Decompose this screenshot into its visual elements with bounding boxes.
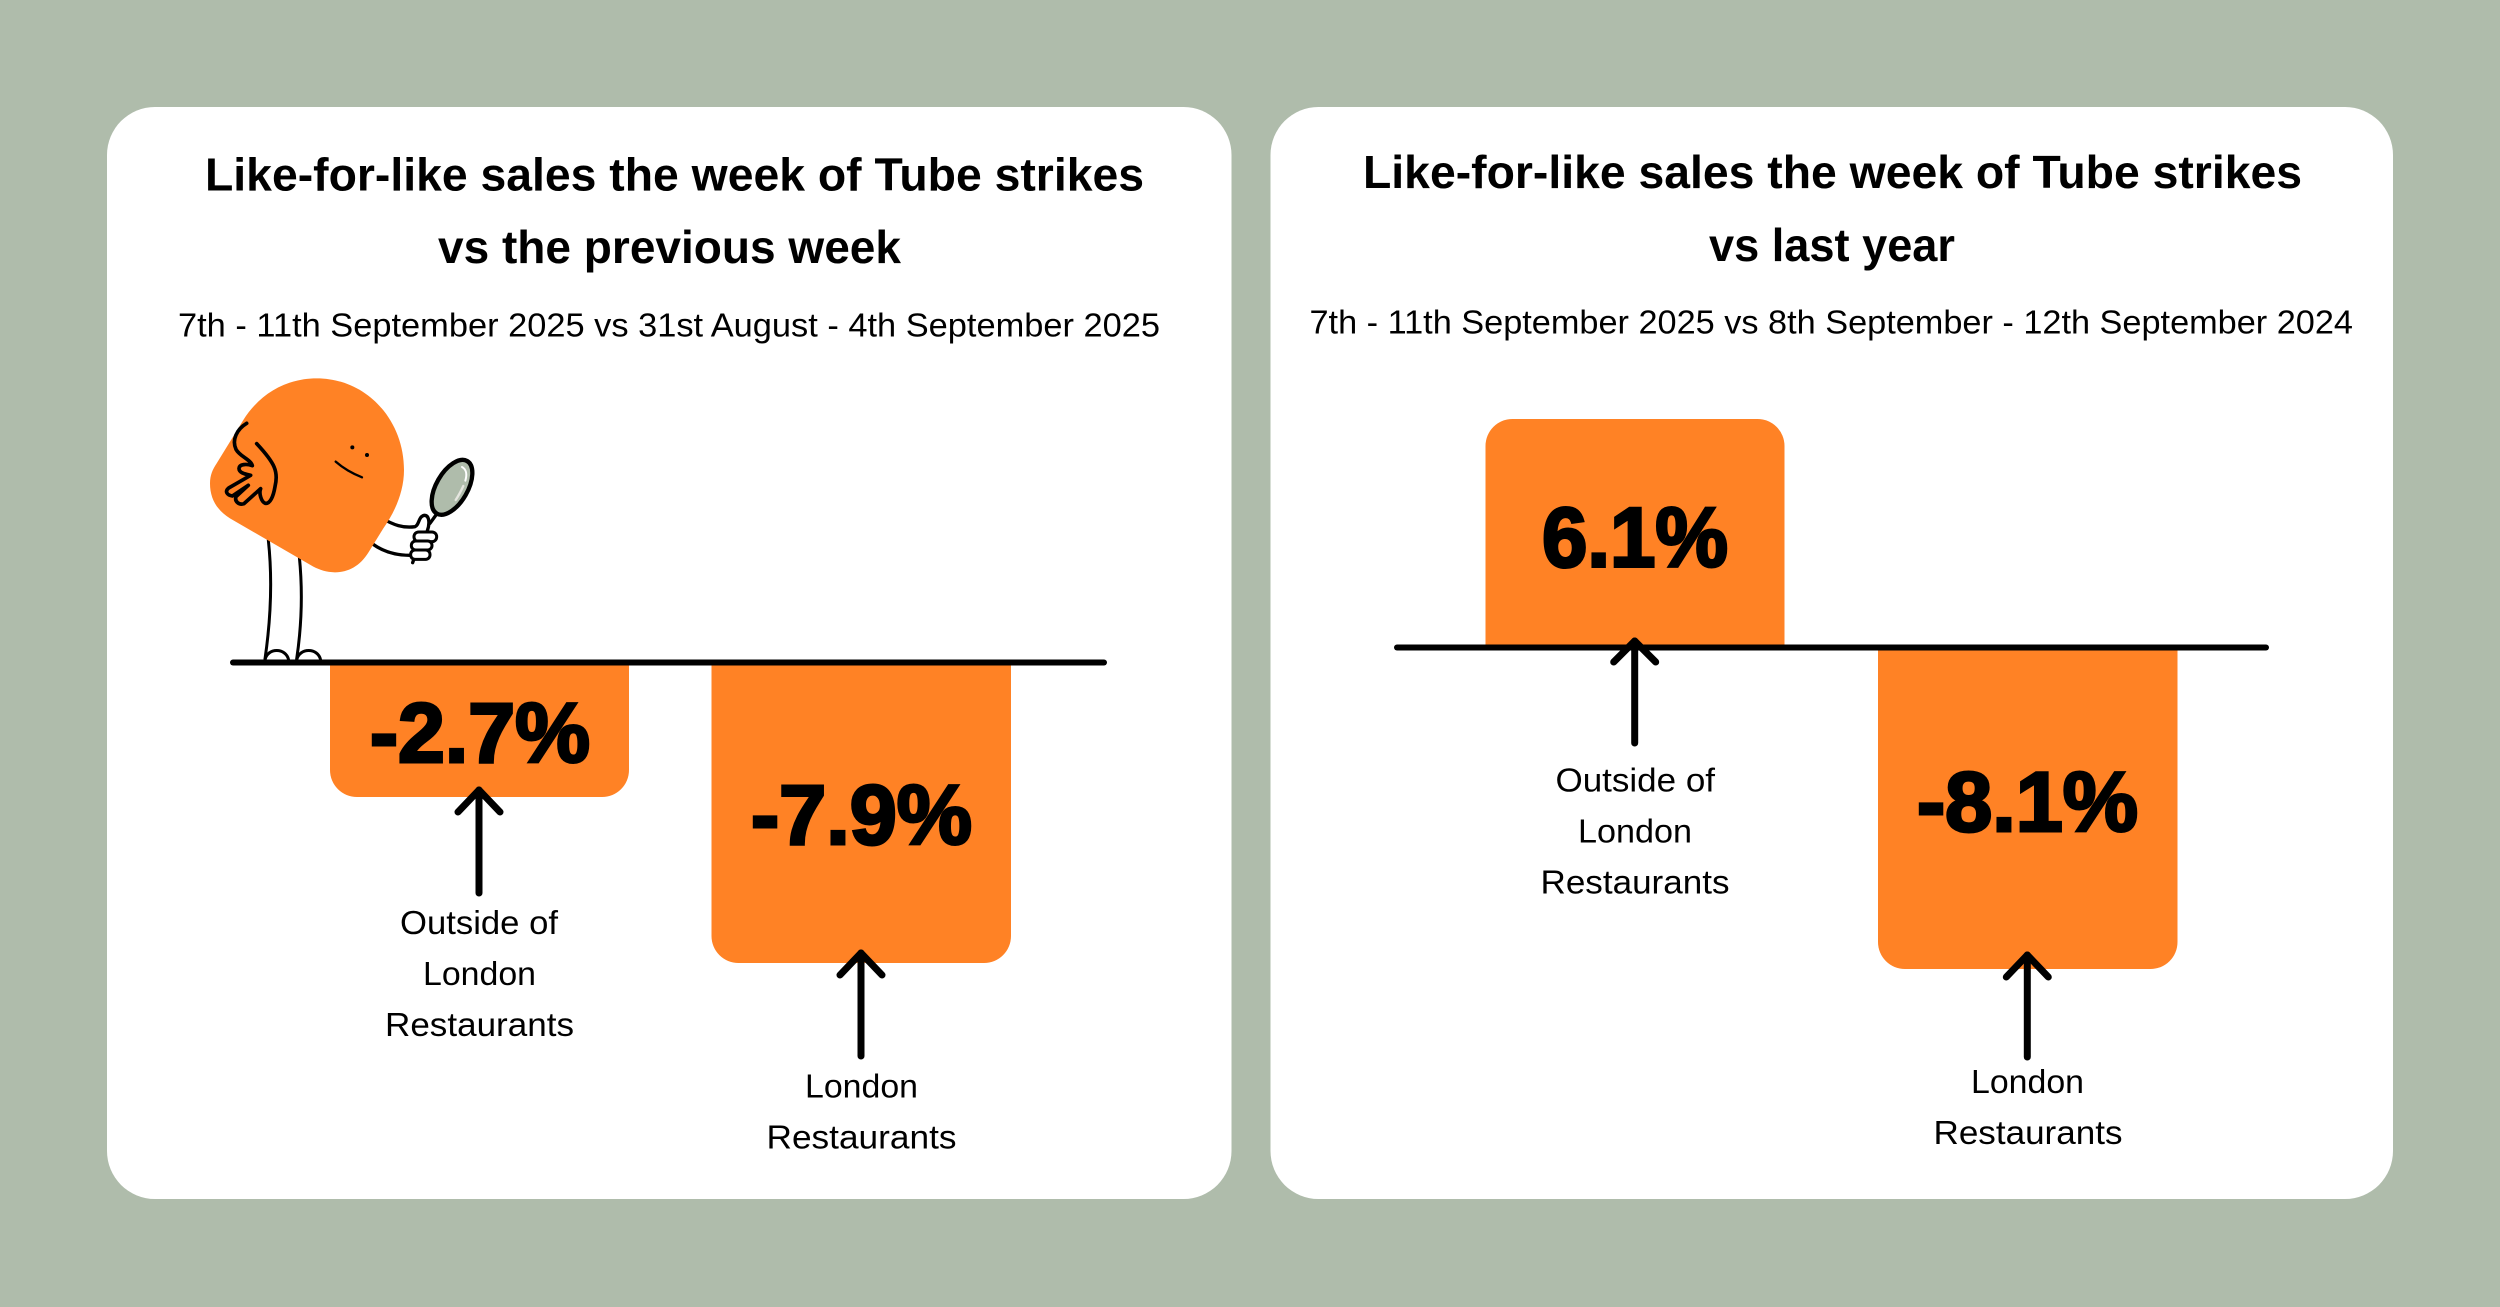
- arrow: London: [2006, 955, 2048, 1057]
- face: [336, 445, 369, 477]
- label: outside of London restaurants: Restaurants: [1540, 864, 1730, 900]
- bar: London -8.1%: [1878, 645, 2178, 969]
- value: -2.7%: -2.7%: [370, 686, 590, 780]
- heading: [205, 148, 1144, 273]
- label: London restaurants: [1934, 1063, 2122, 1151]
- label: outside of London restaurants: [1540, 762, 1730, 900]
- label: outside of London restaurants: Outside of: [1556, 762, 1716, 798]
- label: outside of London restaurants: Restaurants: [385, 1006, 574, 1043]
- illustration: orange character with magnifying glass: [210, 378, 481, 660]
- label: outside of London restaurants: [385, 904, 574, 1043]
- hand on body: [227, 423, 276, 504]
- date range subtitle: 7th - 11th September 2025 vs 31st August - 4th September 2025: [178, 306, 1160, 344]
- axis line: [1397, 644, 2266, 650]
- label: London restaurants: [766, 1068, 956, 1156]
- legs and feet: [265, 540, 321, 660]
- heading: [1363, 146, 2302, 271]
- arrow: London: [840, 953, 882, 1056]
- bar: outside of London -2.7%: [330, 660, 629, 797]
- date range subtitle: 7th - 11th September 2025 vs 8th September - 12th September 2024: [1310, 304, 2353, 340]
- bar: London -7.9%: [712, 660, 1011, 963]
- arm and hand holding magnifier: [373, 515, 437, 563]
- heading: vs last year: [1709, 219, 1955, 271]
- panel: vs last year: [1270, 107, 2393, 1199]
- axis line: [233, 660, 1104, 666]
- body: [210, 378, 404, 572]
- arrow: outside of London: [1614, 641, 1656, 743]
- label: London restaurants: London: [805, 1068, 918, 1104]
- label: London restaurants: London: [1971, 1063, 2084, 1100]
- label: London restaurants: Restaurants: [1934, 1114, 2122, 1151]
- value: -8.1%: -8.1%: [1917, 755, 2138, 849]
- label: outside of London restaurants: London: [423, 955, 536, 992]
- label: outside of London restaurants: Outside of: [400, 904, 559, 941]
- panel card: [107, 107, 1232, 1199]
- value: 6.1%: 6.1%: [1542, 490, 1728, 584]
- bar: outside of London 6.1%: [1486, 419, 1784, 650]
- magnifying glass: [423, 453, 481, 521]
- panel card: [1270, 107, 2393, 1199]
- label: London restaurants: Restaurants: [766, 1118, 956, 1156]
- value: -7.9%: -7.9%: [751, 768, 972, 862]
- panel: vs the previous week: [107, 107, 1232, 1199]
- heading: vs the previous week: [438, 221, 901, 273]
- label: outside of London restaurants: London: [1578, 812, 1692, 850]
- heading: Like-for-like sales the week of Tube strikes: [1363, 146, 2302, 198]
- heading: Like-for-like sales the week of Tube strikes: [205, 148, 1144, 200]
- arrow: outside of London: [458, 790, 500, 893]
